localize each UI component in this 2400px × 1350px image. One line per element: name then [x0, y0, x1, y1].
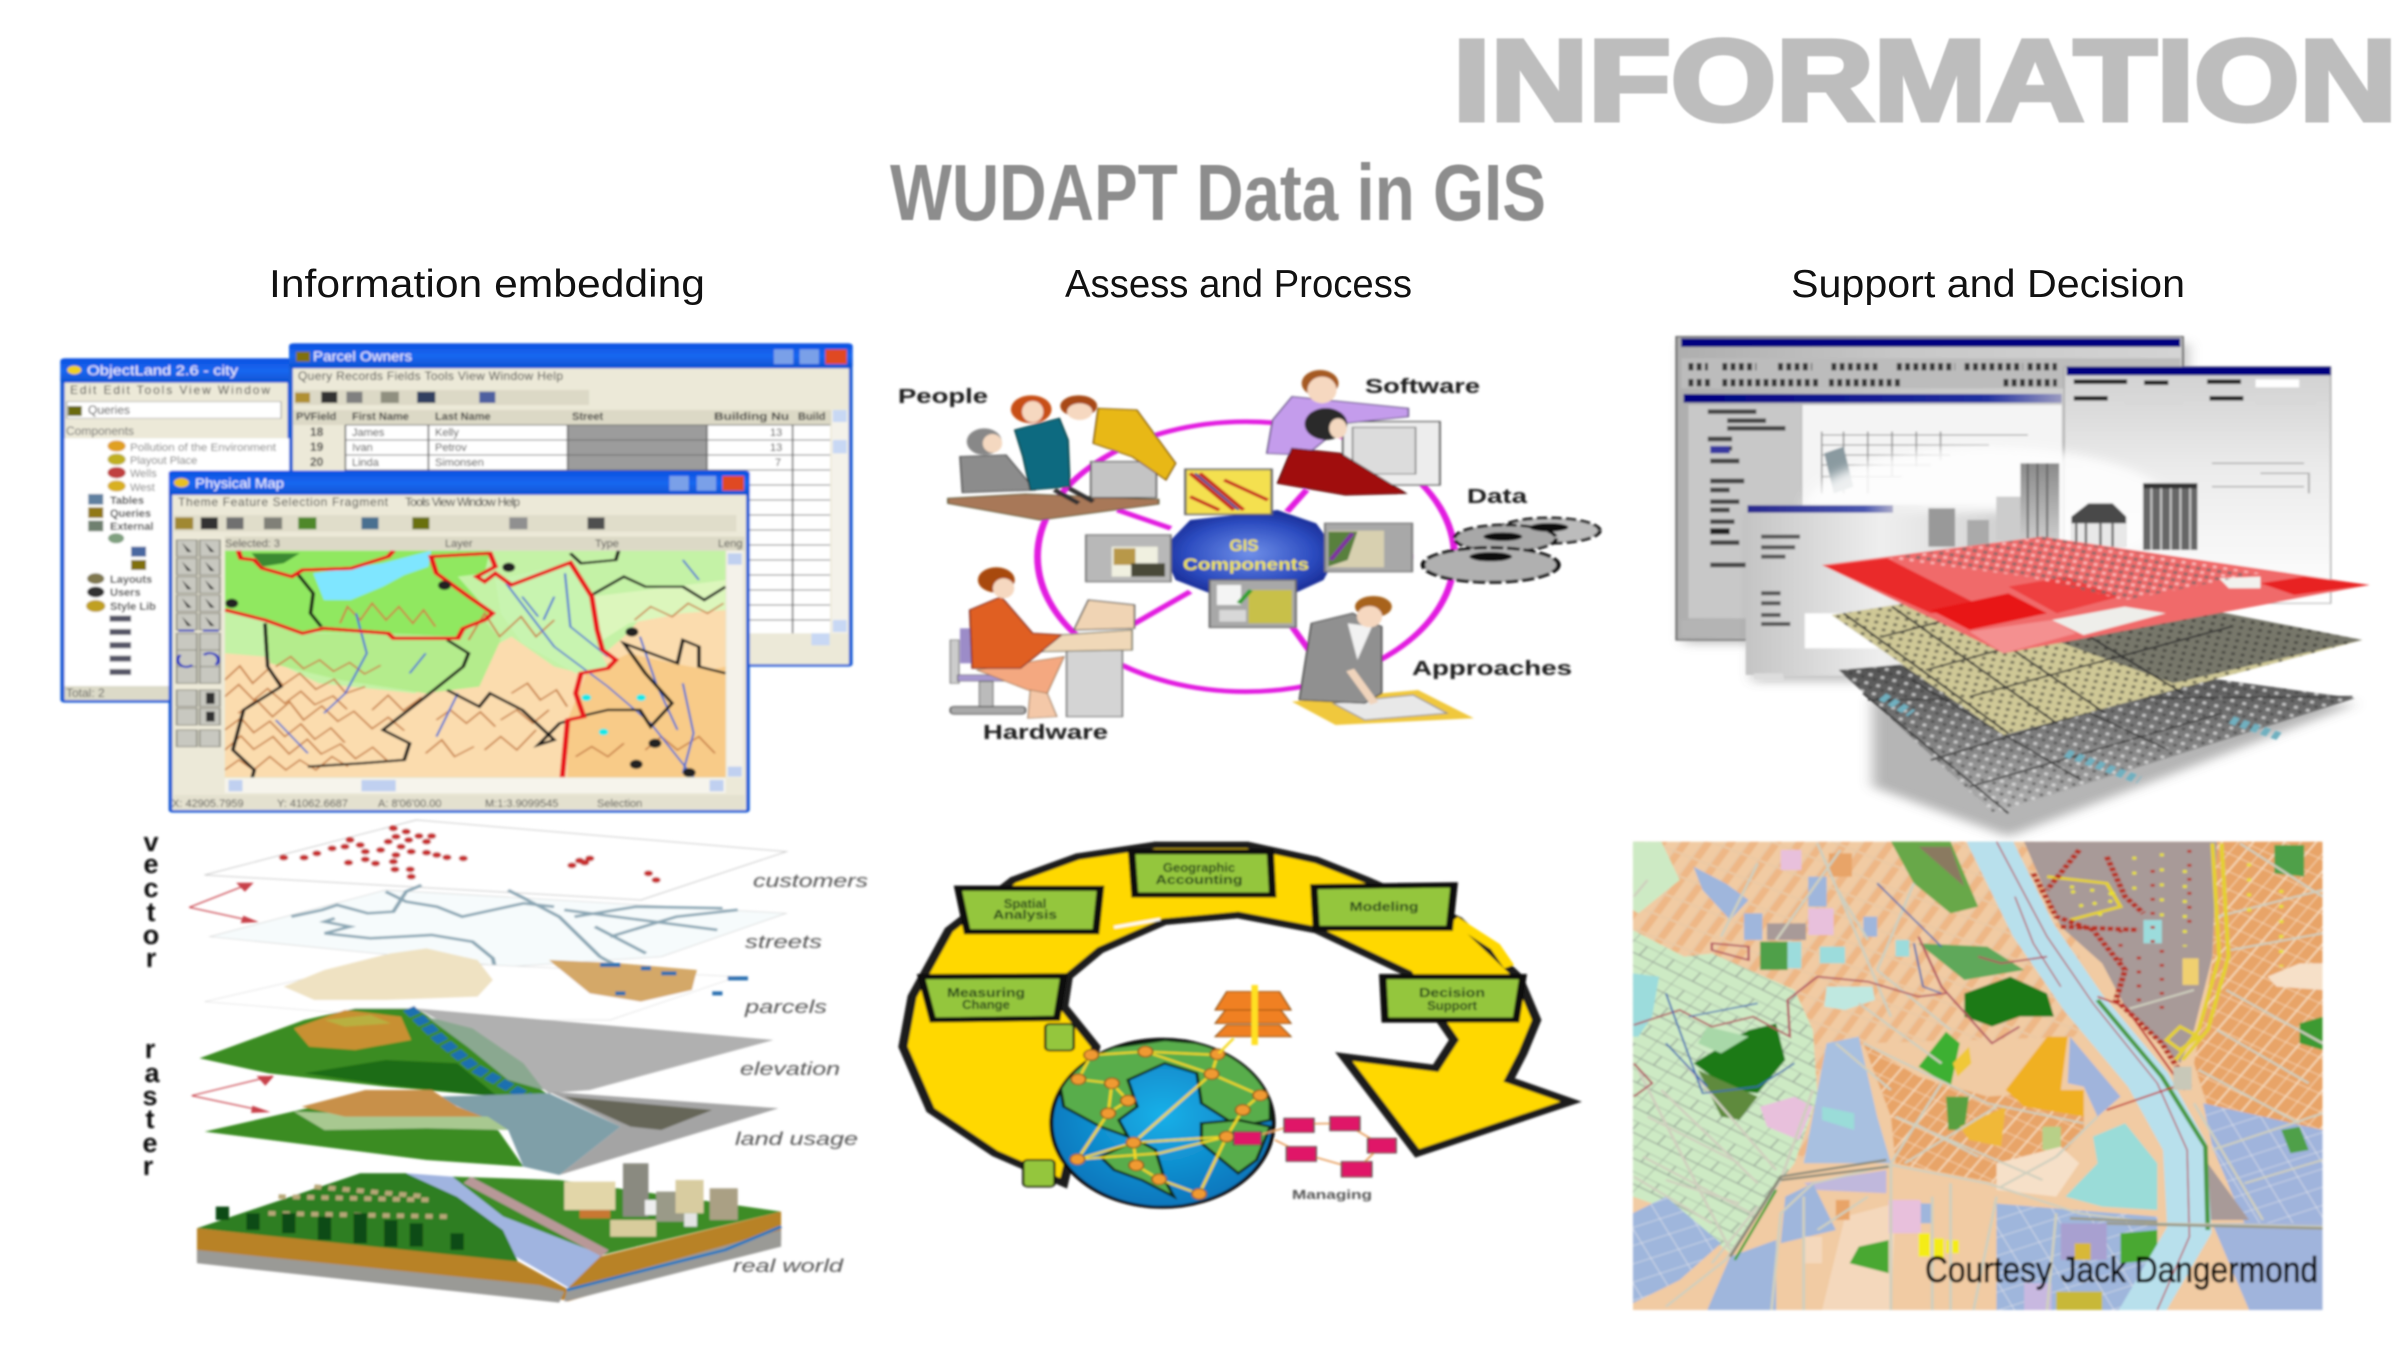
- workflow labels: Spatial: [1004, 896, 1046, 911]
- window text: A: 8'06'00.00: [378, 798, 442, 810]
- window text: Y: 41062.6687: [277, 798, 348, 810]
- vector and raster letters: [142, 827, 160, 1181]
- figures: approaches: [1292, 690, 1474, 725]
- panel: vector and raster layer stack: [142, 820, 868, 1303]
- city towers: [1928, 508, 1955, 547]
- window text: Components: [66, 424, 134, 438]
- window text: Last Name: [435, 411, 491, 423]
- window text: Petrov: [435, 442, 467, 454]
- window text: 13: [770, 427, 782, 439]
- streets layer: [210, 890, 786, 967]
- window text: West: [130, 482, 155, 494]
- window text: Users: [110, 587, 141, 599]
- window text: Leng: [718, 538, 742, 550]
- window text: 7: [775, 457, 781, 469]
- window text: Tools View Window Help: [405, 495, 520, 509]
- workflow labels: Measuring: [947, 985, 1025, 1000]
- window text: Type: [595, 538, 619, 550]
- workflow labels: Geographic: [1163, 860, 1235, 875]
- component labels: Data: [1467, 486, 1528, 508]
- window text: Selected: 3: [225, 538, 280, 550]
- workflow labels: [947, 860, 1485, 1202]
- streets: [1634, 843, 2323, 1310]
- figures: software: [1343, 422, 1440, 485]
- window text: Layouts: [110, 574, 152, 586]
- window text: Linda: [352, 457, 380, 469]
- window text: Query Records Fields Tools View Window Help: [298, 369, 563, 383]
- land usage layer: [549, 1092, 779, 1175]
- elevation layer: [416, 1008, 773, 1093]
- component labels: GIS: [1229, 536, 1259, 555]
- workflow labels: Change: [962, 997, 1010, 1012]
- layer labels: land usage: [735, 1129, 858, 1149]
- window text: Wells: [130, 468, 157, 480]
- workflow labels: Modeling: [1350, 899, 1419, 914]
- component labels: Software: [1365, 376, 1480, 398]
- window text: Selection: [597, 798, 642, 810]
- GIS hub: [1161, 510, 1338, 597]
- workflow labels: Accounting: [1156, 872, 1243, 887]
- yellow cycle arrow: [903, 845, 1571, 1183]
- window text: Build: [798, 411, 826, 423]
- layer arrows: [189, 883, 272, 1112]
- panel: GIS software windows: [60, 343, 853, 813]
- window text: Physical Map: [195, 475, 284, 491]
- workflow labels: Analysis: [993, 907, 1057, 922]
- window text: Queries: [88, 403, 130, 417]
- river: [1987, 837, 2189, 1317]
- figures: hardware: [950, 640, 959, 683]
- layer labels: real world: [733, 1256, 844, 1276]
- historic center marks: [2030, 848, 2180, 1068]
- pink network nodes: [1247, 1123, 1381, 1169]
- window text: Street: [572, 411, 604, 423]
- window text: Building Nu: [714, 411, 789, 423]
- figures: data disks: [1498, 518, 1600, 543]
- window text: Ivan: [352, 442, 373, 454]
- ring and spokes: [1038, 422, 1454, 692]
- window text: PVField: [296, 411, 336, 423]
- parcels layer: [205, 960, 738, 1020]
- window text: 20: [310, 455, 324, 469]
- step boxes: [921, 852, 1523, 1020]
- component labels: Hardware: [983, 722, 1108, 744]
- real world block: [197, 1173, 518, 1263]
- customers layer: [205, 820, 786, 900]
- window text: First Name: [352, 411, 409, 423]
- window text: Parcel Owners: [313, 348, 412, 364]
- window text: ObjectLand 2.6 - city: [87, 362, 238, 378]
- column heading: information embedding: Information embedding: [269, 263, 705, 306]
- map layers: [1873, 697, 2357, 837]
- window text: External: [110, 521, 153, 533]
- window text: James: [352, 427, 385, 439]
- figures: people: [948, 494, 1159, 520]
- component labels: People: [898, 386, 988, 408]
- panel: layered GIS composite: [1676, 337, 2369, 837]
- window text: Kelly: [435, 427, 459, 439]
- window text: Pollution of the Environment: [130, 442, 276, 454]
- component labels: [898, 376, 1572, 744]
- window text: Edit Edit Tools View Window: [70, 383, 270, 397]
- window text: 18: [310, 425, 324, 439]
- workflow labels: Decision: [1419, 985, 1485, 1000]
- panel: GIS components diagram: [898, 370, 1600, 744]
- panel: land use map: [1633, 837, 2323, 1317]
- window text: Simonsen: [435, 457, 484, 469]
- layer labels: customers: [753, 871, 868, 891]
- window text: Queries: [110, 508, 151, 520]
- workflow labels: Managing: [1292, 1187, 1372, 1202]
- map credit: Courtesy Jack Dangermond: [1925, 1249, 2318, 1290]
- title: WUDAPT Data in GIS: [890, 148, 1546, 237]
- component labels: Components: [1183, 555, 1309, 574]
- layer labels: elevation: [740, 1059, 840, 1079]
- globe: [1051, 1039, 1274, 1207]
- window text: Theme Feature Selection Fragment: [178, 495, 389, 509]
- window text: M:1:3.9099545: [485, 798, 558, 810]
- section header: INFORMATION: INFORMATION: [1453, 17, 2397, 145]
- data cans: [1023, 1024, 1074, 1187]
- window text: Layer: [445, 538, 473, 550]
- component labels: Approaches: [1412, 658, 1572, 680]
- window text: Tables: [110, 495, 144, 507]
- column heading: support and decision: Support and Decision: [1791, 263, 2185, 306]
- layer labels: [733, 871, 868, 1276]
- panel: GIS workflow arrow and globe: [903, 845, 1571, 1207]
- window text: 19: [310, 440, 324, 454]
- window text: 13: [770, 442, 782, 454]
- window text: Playout Place: [130, 455, 197, 467]
- column heading: assess and process: Assess and Process: [1065, 263, 1412, 306]
- vector and raster letters: vector: [143, 827, 159, 973]
- window text: Total: 2: [66, 686, 105, 700]
- layer labels: parcels: [744, 997, 827, 1017]
- vector and raster letters: raster: [142, 1034, 160, 1181]
- workflow labels: Support: [1427, 998, 1478, 1013]
- layer labels: streets: [745, 932, 822, 952]
- window text: Style Lib: [110, 601, 156, 613]
- window text: [66, 348, 826, 810]
- stacked layers icon: [1215, 992, 1291, 1037]
- window text: X: 42905.7959: [172, 798, 244, 810]
